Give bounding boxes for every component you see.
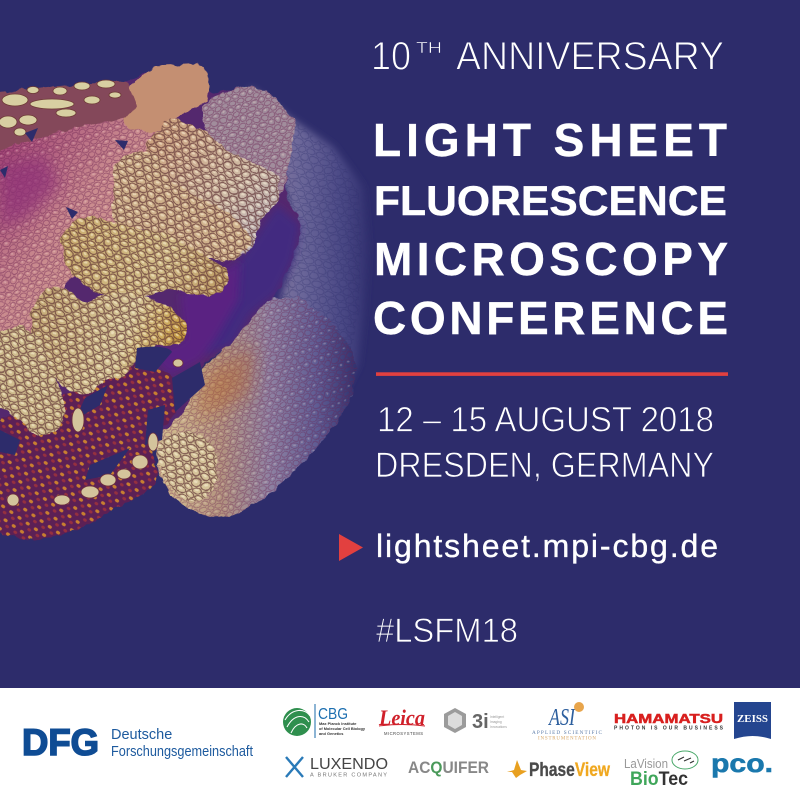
title: conference name: MICROSCOPY: [374, 233, 728, 285]
logo: DFG: Forschungsgemeinschaft: [111, 744, 253, 760]
hashtag: #LSFM18: [376, 612, 518, 650]
date and place: 12 – 15 AUGUST 2018: [377, 400, 714, 440]
logo: DFG: [22, 722, 253, 763]
tissue: upper lobe: [145, 118, 280, 262]
tissue: lower right mass: [156, 296, 358, 517]
logo: Luxendo: LUXENDO: [310, 756, 388, 773]
logo: ASI: ASI: [547, 705, 576, 731]
title: conference name: LIGHT SHEET: [373, 114, 727, 166]
logo: PhaseView: PhaseView: [529, 760, 610, 781]
tissue: ghost cell texture: [250, 92, 362, 395]
tissue: dark purple centre: [195, 205, 300, 355]
logo: Hamamatsu: [614, 711, 724, 732]
divider: red rule: [376, 372, 728, 376]
logo: 3i: 3i: [472, 711, 489, 733]
tissue: second golden lobe: [30, 286, 187, 394]
icon: red arrow: [339, 534, 363, 561]
logo: Leica: Leica: [378, 705, 425, 730]
tissue: pink body left: [0, 118, 158, 334]
date and place: [375, 400, 714, 485]
logo: DFG: DFG: [22, 722, 99, 763]
tissue: lower speckled area: [0, 364, 176, 540]
date and place: DRESDEN, GERMANY: [375, 446, 714, 485]
logo: CBG: [283, 704, 366, 738]
logo: ASI: APPLIED SCIENTIFIC: [532, 730, 603, 736]
logo: CBG: and Genetics: [319, 731, 343, 736]
logo: LaVision BioTec: BioTec: [630, 769, 688, 790]
logo: Leica: MICROSYSTEMS: [384, 731, 423, 736]
logo: Luxendo: A BRUKER COMPANY: [310, 772, 387, 778]
tissue: magenta shade: [0, 155, 60, 230]
heading: anniversary: TH: [416, 40, 442, 57]
title: conference name: CONFERENCE: [373, 292, 728, 344]
tissue: bead band base: [0, 80, 137, 151]
logo: Acquifer: ACQUIFER: [408, 758, 489, 777]
logo: Hamamatsu: HAMAMATSU: [614, 711, 723, 726]
logo: 3i: Intelligent: [490, 715, 504, 719]
logo: LaVision BioTec: LaVision: [624, 757, 668, 771]
tissue: lower edge of the mass: [156, 431, 218, 502]
website url: lightsheet.mpi-cbg.de: [376, 528, 718, 564]
logo: CBG: CBG: [318, 706, 348, 723]
logo: DFG: Deutsche: [111, 727, 172, 743]
logo: Zeiss: ZEISS: [737, 714, 768, 725]
tissue: faded right side: [250, 88, 368, 400]
logo: CBG: Max Planck Institute: [319, 721, 357, 726]
tissue: cream beads top-left: [0, 80, 121, 136]
logo: ASI: [532, 702, 603, 742]
logo: 3i: [444, 708, 507, 733]
logo: CBG: of Molecular Cell Biology: [319, 726, 366, 731]
logo: Zeiss: [734, 702, 771, 739]
logo: 3i: Imaging: [490, 720, 502, 724]
title: conference name: FLUORESCENCE: [374, 177, 727, 224]
sponsor strip: [0, 688, 800, 800]
heading: anniversary: ANNIVERSARY: [456, 34, 724, 78]
tissue: golden lobe: [60, 215, 229, 298]
microscopy image: embryo tissue: [0, 62, 365, 540]
logo: LaVision BioTec: [624, 751, 698, 790]
tissue: top tan patch: [124, 62, 210, 133]
title: conference name: [373, 114, 728, 344]
logo: 3i: Innovations: [490, 725, 507, 729]
tissue: orange speckle on the lower mass: [195, 345, 255, 420]
tissue: mauve top lobe: [202, 86, 296, 194]
logo: pco: pco.: [711, 748, 773, 778]
tissue: left golden lobe: [0, 324, 66, 436]
tissue: centre lobe: [111, 151, 252, 262]
tissue: bottom cream beads: [7, 359, 183, 506]
tissue: magenta centre: [150, 262, 240, 375]
tissue: dark gaps: [0, 128, 205, 480]
tissue: dark purple base silhouette: [0, 72, 300, 430]
logo: Hamamatsu: PHOTON IS OUR BUSINESS: [614, 726, 724, 732]
logo: Luxendo: [286, 756, 388, 778]
logo: ASI: INSTRUMENTATION: [538, 736, 596, 742]
heading: anniversary: 10: [371, 34, 411, 78]
